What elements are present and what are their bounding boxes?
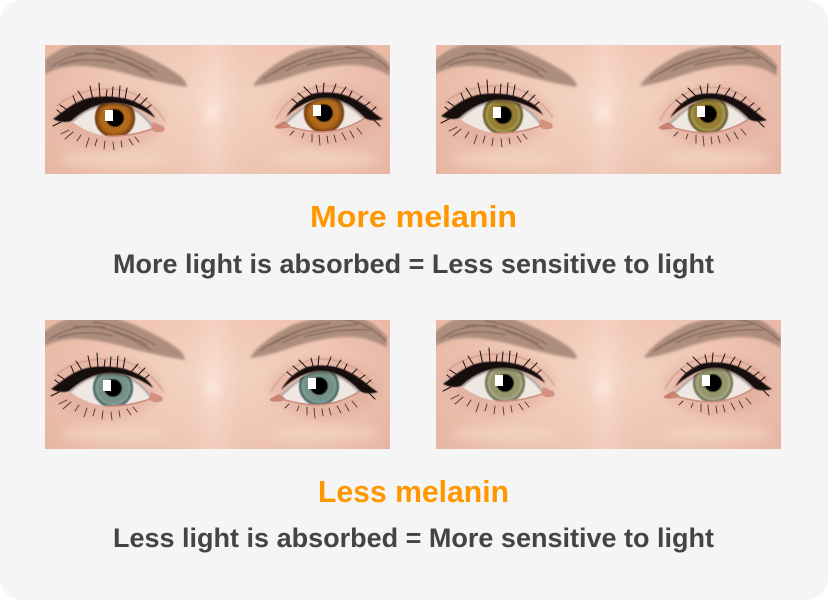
- photo: grey-green eyes: [435, 316, 781, 449]
- photo: hazel eyes: [435, 44, 781, 174]
- caption: more melanin: More light is absorbed = Less sensitive to light: [113, 249, 714, 279]
- photo: brown eyes: [45, 44, 391, 174]
- heading: more melanin: More melanin: [310, 199, 517, 234]
- caption: less melanin: Less light is absorbed = More sensitive to light: [113, 523, 714, 553]
- heading: less melanin: Less melanin: [318, 474, 509, 509]
- photo: blue-green eyes: [43, 317, 390, 449]
